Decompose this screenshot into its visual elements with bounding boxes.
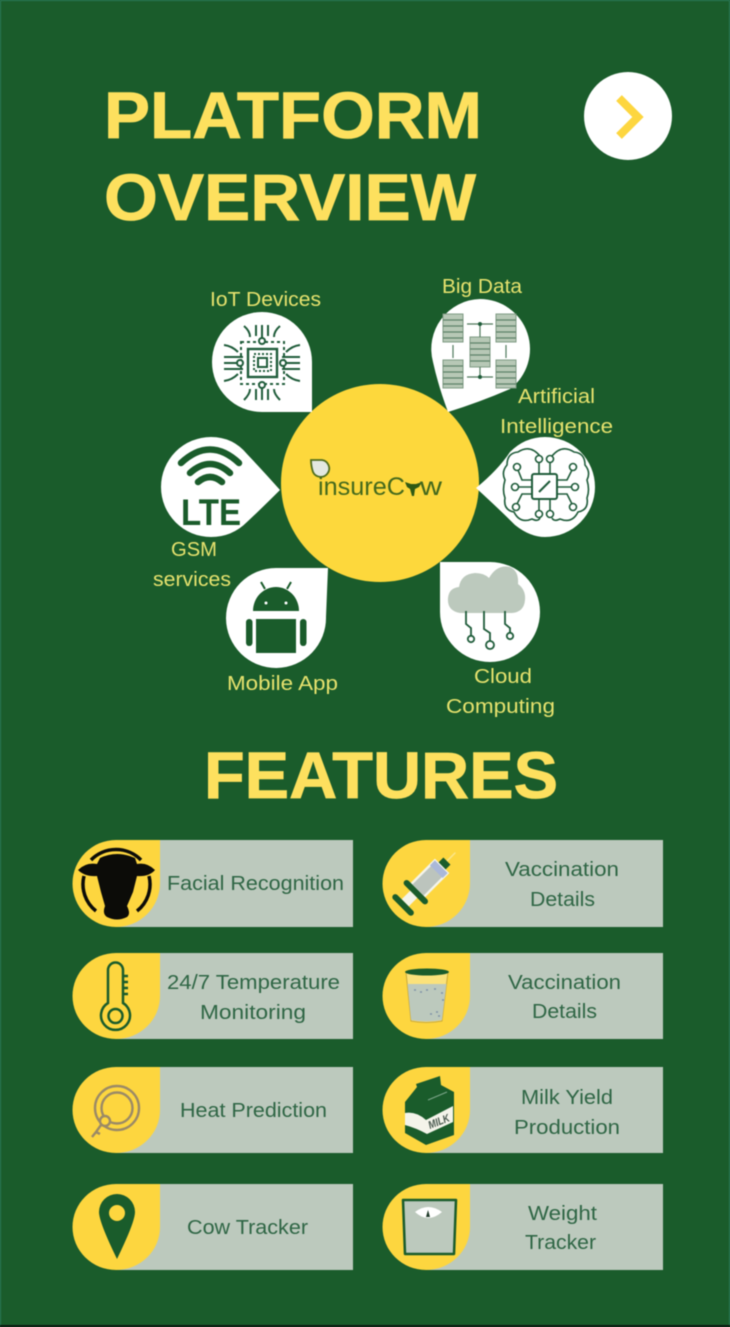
- logo: insureCow: w: [419, 473, 443, 501]
- panel: Weight Tracker: [382, 1184, 663, 1270]
- icon: syringe: [390, 841, 467, 918]
- label: Artificial Intelligence: Intelligence: [500, 416, 613, 438]
- icon: cow head: [78, 849, 155, 920]
- text: Tracker: [525, 1232, 596, 1254]
- text: Weight: [528, 1203, 597, 1225]
- label: Artificial Intelligence: Artificial: [518, 386, 595, 408]
- icon: LTE drop: LTE: [181, 492, 241, 533]
- text: [514, 1087, 620, 1139]
- text: [525, 1203, 597, 1254]
- icon: LTE drop: [161, 437, 280, 537]
- icon: Big Data drop: [431, 299, 530, 412]
- icon: next arrow button: [584, 72, 672, 160]
- icon: AI brain drop: [476, 437, 595, 537]
- icon: heat ring: [92, 1086, 139, 1137]
- text: [508, 972, 621, 1023]
- text: Production: [514, 1117, 620, 1139]
- label: Mobile App: Mobile App: [227, 673, 338, 695]
- panel: Milk Yield Production: [382, 1067, 663, 1153]
- title: PLATFORM: [104, 78, 482, 152]
- logo: insureCow: [311, 460, 443, 501]
- text: Details: [530, 889, 595, 911]
- label: Cloud Computing: Computing: [446, 696, 555, 718]
- logo: insureCow: insureC: [318, 473, 405, 501]
- label: Cloud Computing: Cloud: [474, 666, 532, 688]
- text: [505, 859, 619, 911]
- label: Artificial Intelligence: [500, 386, 613, 438]
- heading: features: FEATURES: [204, 738, 558, 812]
- text: Cow Tracker: [187, 1217, 308, 1239]
- icon: glass of water: [405, 968, 449, 1022]
- panel: Vaccination Details two: [382, 953, 663, 1039]
- icon: IoT chip drop: [212, 312, 312, 412]
- icon: milk carton: [405, 1076, 454, 1145]
- icon: Cloud Computing drop: [440, 562, 540, 662]
- text: Facial Recognition: [167, 873, 344, 895]
- panel: Temperature Monitoring: [72, 953, 353, 1039]
- text: Vaccination: [505, 859, 619, 881]
- label: GSM services: GSM: [171, 539, 217, 561]
- label: GSM services: services: [153, 569, 231, 591]
- icon: Mobile App drop: [226, 568, 328, 668]
- title: OVERVIEW: [104, 160, 477, 234]
- label: Big Data: Big Data: [442, 276, 523, 298]
- text: Details: [532, 1001, 597, 1023]
- icon: location pin: [99, 1194, 135, 1259]
- icon: thermometer: [101, 963, 130, 1030]
- label: IoT Devices: IoT Devices: [210, 289, 321, 311]
- panel: Heat Prediction: [72, 1067, 353, 1153]
- label: GSM services: [153, 539, 231, 591]
- text: Vaccination: [508, 972, 621, 994]
- panel: Vaccination Details one: [382, 840, 663, 927]
- text: Milk Yield: [521, 1087, 613, 1109]
- central circle with logo: [281, 384, 479, 582]
- title: [104, 78, 482, 234]
- panel: Facial Recognition: [72, 840, 353, 927]
- icon: milk carton: MILK: [427, 1112, 452, 1132]
- text: 24/7 Temperature: [167, 972, 340, 994]
- icon: weighing scale: [403, 1200, 456, 1254]
- text: [167, 972, 340, 1024]
- text: Monitoring: [200, 1002, 306, 1024]
- label: Cloud Computing: [446, 666, 555, 718]
- text: Heat Prediction: [180, 1100, 327, 1122]
- panel: Cow Tracker: [72, 1184, 353, 1270]
